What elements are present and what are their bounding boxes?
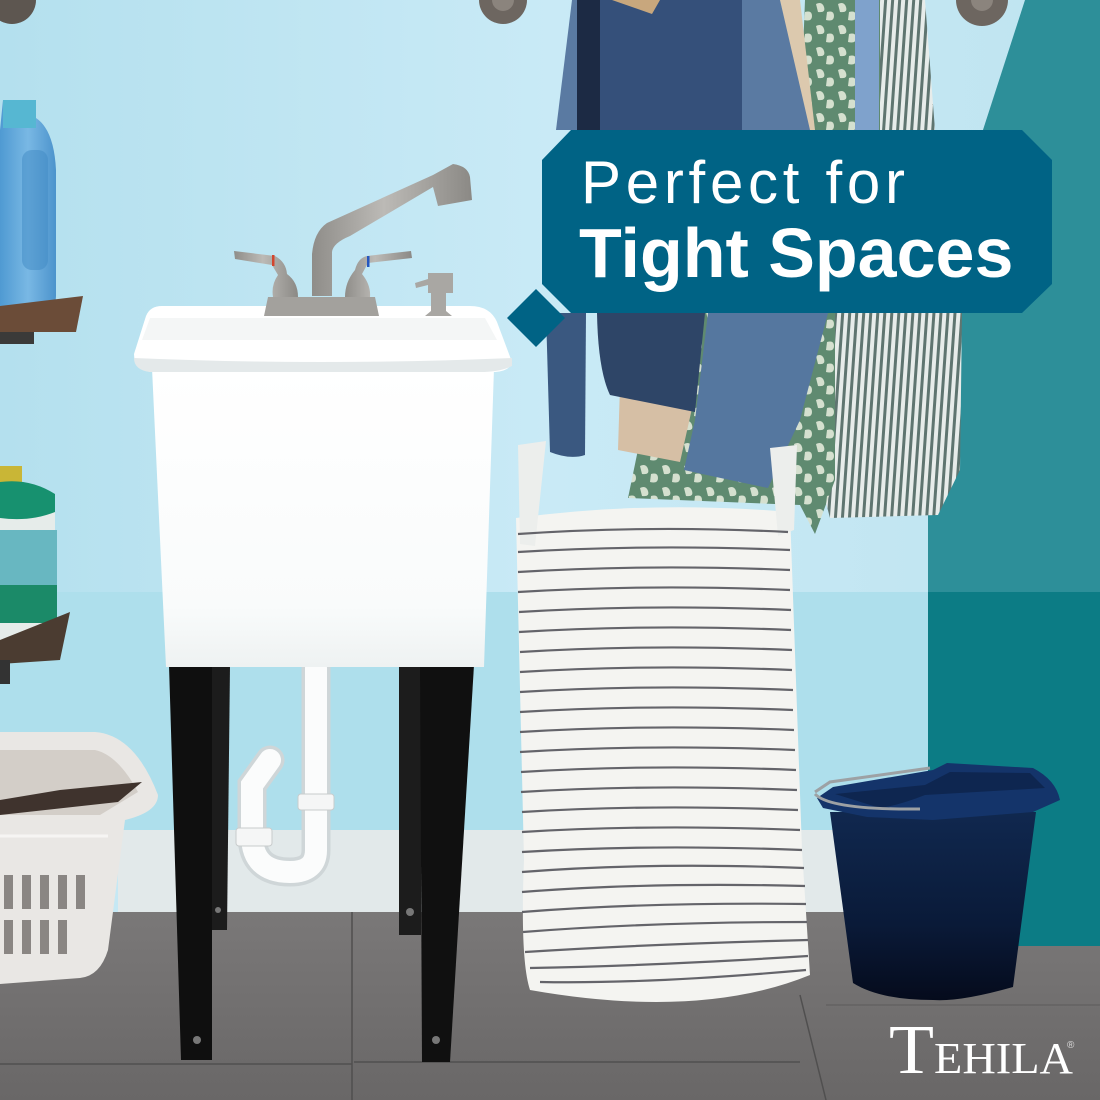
drain pipe [236, 668, 334, 872]
headline text: Tight Spaces [579, 214, 1013, 292]
sink front legs [169, 665, 474, 1062]
faucet [234, 164, 472, 316]
baseboard [118, 830, 938, 913]
denim jacket right [684, 313, 828, 488]
denim sleeve [546, 313, 586, 457]
wall hooks [0, 0, 1008, 26]
headline text [579, 149, 1013, 292]
headline text: Perfect for [581, 149, 905, 216]
navy bucket [815, 763, 1060, 1000]
headline callout [507, 130, 1052, 347]
callout pointer diamond [507, 289, 565, 347]
registered mark: ® [1067, 1040, 1075, 1051]
brand logo: TEHILA [889, 1012, 1073, 1089]
hot handle [234, 251, 298, 297]
floral shirt [628, 0, 880, 534]
utility sink tub [134, 306, 512, 667]
cold handle [345, 251, 412, 297]
soap dispenser [415, 273, 453, 316]
striped shirt [820, 0, 962, 518]
laundry basket [0, 732, 158, 984]
left shelf with wipes [0, 466, 70, 684]
background wall [0, 0, 1100, 832]
teal wall panel [928, 0, 1100, 946]
denim jacket bottom [597, 313, 705, 412]
floor tiles [0, 912, 1100, 1100]
left shelf with detergent [0, 100, 83, 344]
striped hamper [516, 441, 810, 1002]
hanging clothes [546, 0, 962, 534]
sink back legs [212, 665, 421, 935]
denim jacket top [556, 0, 810, 130]
spout [312, 164, 472, 296]
